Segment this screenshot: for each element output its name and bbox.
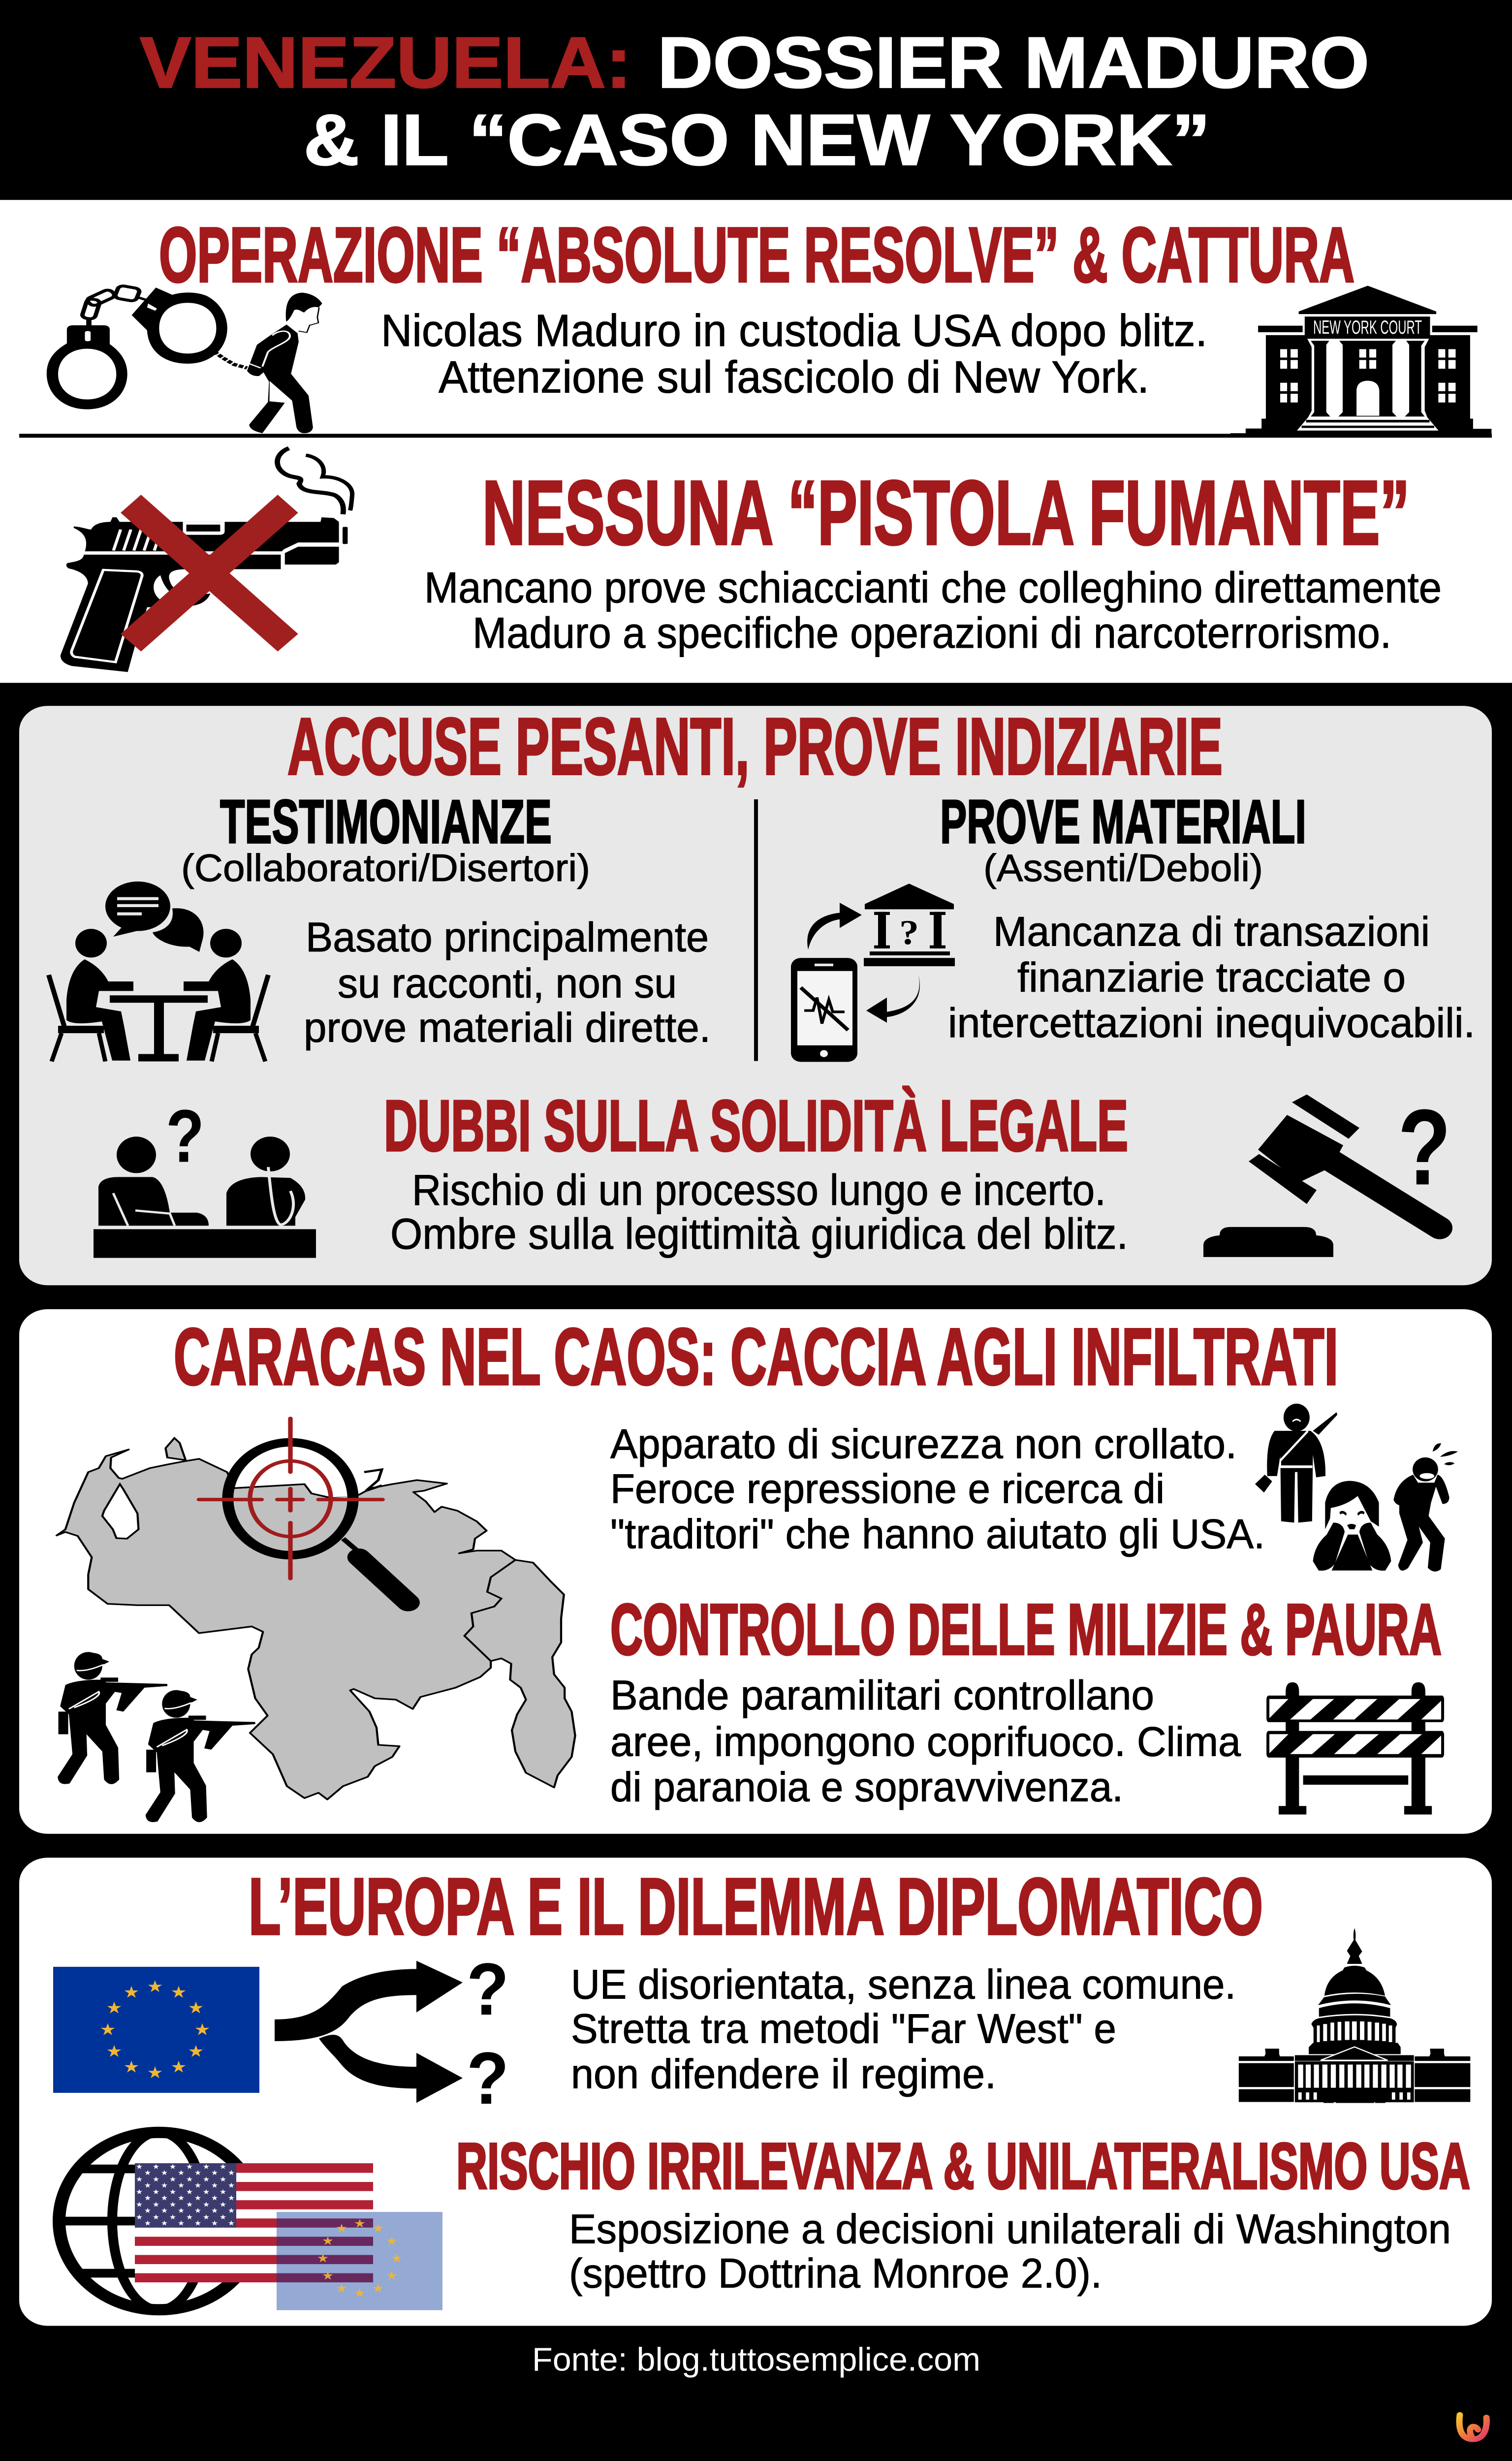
body text: testimonianze (304, 914, 711, 1051)
icon: handcuffs and prisoner (47, 285, 322, 433)
body text: dubbi: Ombre sulla legittimità giuridica del blitz. (390, 1210, 1128, 1258)
body text: no proof (424, 563, 1442, 657)
icon: forked arrows with question marks (275, 1948, 509, 2119)
body text: dubbi (390, 1166, 1128, 1258)
map of venezuela with crosshair magnifier (57, 1419, 575, 1822)
panel: operation and smoking gun (0, 200, 1512, 683)
body text: bande: di paranoia e sopravvivenza. (610, 1764, 1123, 1810)
body text: UE: UE disorientata, senza linea comune. (571, 1961, 1236, 2008)
title: & IL “CASO NEW YORK” (304, 100, 1210, 181)
icon: forked arrows with question marks: ? (467, 1948, 509, 2030)
body text: testimonianze: Basato principalmente (306, 914, 709, 961)
body text: apparato: Apparato di sicurezza non crollato. (610, 1421, 1237, 1467)
icon: gavel and question mark (1203, 1087, 1451, 1257)
body text: testimonianze: prove materiali dirette. (304, 1005, 711, 1051)
title: DOSSIER MADURO (658, 23, 1369, 103)
body text: esposizione (569, 2206, 1451, 2297)
body text: prove materiali: finanziarie tracciate o (1017, 954, 1406, 1001)
body text: apparato: "traditori" che hanno aiutato gli USA. (610, 1511, 1265, 1557)
body text: UE (571, 1961, 1236, 2097)
icon: two doubtful people at a desk (94, 1095, 316, 1258)
body text: apparato: Feroce repressione e ricerca di (610, 1466, 1165, 1512)
icon: road barrier (1266, 1682, 1444, 1815)
body text: apparato (610, 1421, 1265, 1557)
title: VENEZUELA: (140, 23, 631, 103)
column heading: prove materiali (940, 788, 1306, 889)
icon: gavel and question mark: ? (1398, 1087, 1451, 1207)
body text: bande (610, 1672, 1241, 1810)
body text: UE: Stretta tra metodi "Far West" e (571, 2006, 1116, 2052)
column divider (754, 799, 758, 1061)
body text: custody: Attenzione sul fascicolo di New York. (439, 351, 1149, 402)
icon: bank, phone and arrows: ? (899, 914, 919, 952)
body text: dubbi: Rischio di un processo lungo e incerto. (412, 1166, 1106, 1214)
icon: two doubtful people at a desk: ? (166, 1095, 204, 1178)
divider line (19, 434, 1492, 438)
icon: new york court (1230, 285, 1491, 438)
icon: forked arrows with question marks: ? (467, 2037, 509, 2119)
body text: custody: Nicolas Maduro in custodia USA dopo blitz. (381, 305, 1207, 356)
body text: prove materiali: Mancanza di transazioni (993, 909, 1430, 955)
panel: caracas (19, 1309, 1492, 1834)
body text: custody (381, 305, 1207, 402)
column heading: testimonianze (181, 788, 590, 889)
body text: testimonianze: su racconti, non su (338, 960, 677, 1007)
icon: armed guard and frightened civilians (1255, 1404, 1458, 1572)
panel: europa (19, 1858, 1492, 2326)
icon: bank, phone and arrows (791, 883, 955, 1062)
icon: two people talking at a table (49, 882, 268, 1061)
body text: bande: Bande paramilitari controllano (610, 1672, 1154, 1719)
icon: logo (1459, 2415, 1486, 2439)
body text: bande: aree, impongono coprifuoco. Clima (610, 1719, 1241, 1765)
icon: globe with US and EU flags (59, 2132, 442, 2310)
icon: capitol building (1239, 1928, 1470, 2103)
icon: smoking gun crossed out (61, 448, 352, 672)
column heading: prove materiali: (Assenti/Deboli) (983, 847, 1263, 889)
body text: prove materiali (948, 909, 1475, 1046)
body text: UE: non difendere il regime. (571, 2051, 996, 2097)
column heading: testimonianze: (Collaboratori/Disertori) (181, 847, 590, 889)
panel: accuse pesanti (19, 701, 1492, 1285)
column heading: testimonianze: TESTIMONIANZE (220, 788, 552, 856)
icon: new york court: NEW YORK COURT (1313, 316, 1422, 338)
icon: EU flag (53, 1967, 259, 2093)
title (140, 23, 1369, 181)
body text: esposizione: (spettro Dottrina Monroe 2.0). (569, 2250, 1102, 2297)
source footer: Fonte: blog.tuttosemplice.com (532, 2341, 980, 2378)
